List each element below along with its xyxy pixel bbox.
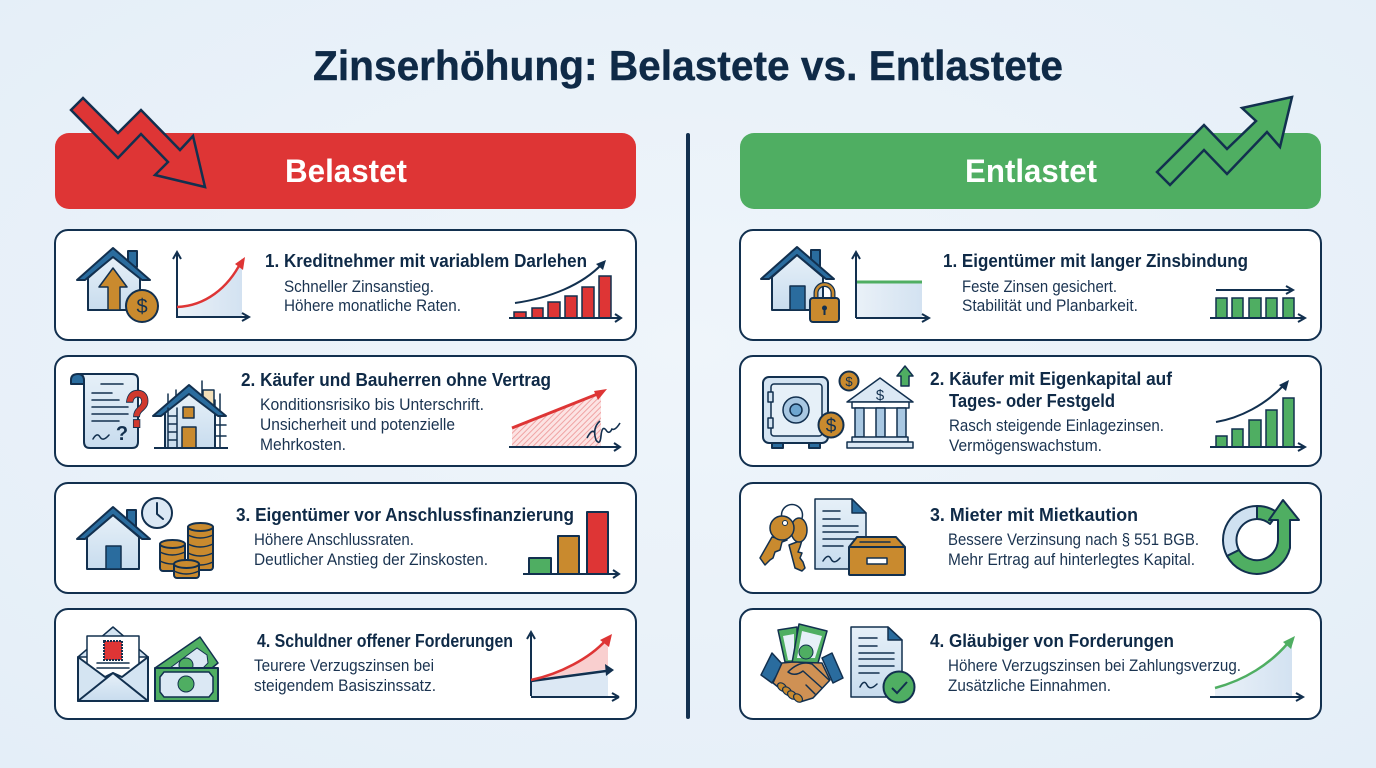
heading: 1. Eigentümer mit langer Zinsbindung [943, 250, 1248, 271]
description: steigendem Basiszinssatz. [254, 676, 436, 695]
icon: house [77, 507, 150, 569]
center divider [686, 133, 690, 719]
icon: banknotes [155, 637, 218, 701]
description: Unsicherheit und potenzielle [260, 415, 455, 434]
icon: house with padlock [761, 247, 839, 322]
description [254, 530, 488, 569]
description: Höhere Verzugszinsen bei Zahlungsverzug. [948, 656, 1241, 675]
icon: house under construction [153, 381, 228, 448]
description: Höhere monatliche Raten. [284, 296, 461, 315]
card 3: Mieter mit Mietkaution [740, 483, 1321, 593]
icon: handshake with banknotes [761, 624, 843, 704]
header: Belastet [55, 133, 636, 209]
description: Mehrkosten. [260, 435, 346, 454]
description [254, 656, 436, 695]
icon: safe with coins [763, 372, 858, 448]
description: Vermögenswachstum. [949, 436, 1102, 455]
icon: envelope with letter [78, 627, 148, 701]
header: Entlastet [740, 133, 1321, 209]
description [948, 656, 1241, 695]
chart: risk area with signature [509, 389, 620, 451]
description [284, 277, 461, 315]
chart: two diverging lines [527, 632, 619, 701]
card 3: Eigentümer vor Anschlussfinanzierung [55, 483, 636, 593]
heading: 3. Eigentümer vor Anschlussfinanzierung [236, 504, 574, 525]
description: Bessere Verzinsung nach § 551 BGB. [948, 530, 1199, 549]
icon: contract with question mark [71, 374, 150, 448]
icon: clock [142, 498, 172, 528]
icon: keys [760, 504, 807, 571]
heading: 4. Gläubiger von Forderungen [930, 630, 1174, 651]
icon: document with check [851, 627, 914, 702]
heading: 1. Kreditnehmer mit variablem Darlehen [265, 250, 587, 271]
heading: Tages- oder Festgeld [949, 390, 1115, 411]
heading: 2. Käufer mit Eigenkapital auf [930, 368, 1173, 389]
description: Deutlicher Anstieg der Zinskosten. [254, 550, 488, 569]
header: Belastet: Belastet [285, 153, 407, 189]
description: Rasch steigende Einlagezinsen. [949, 416, 1164, 435]
icon: contract with question mark: ? [116, 423, 128, 445]
icon: safe with coins: $ [845, 374, 853, 389]
heading: 3. Mieter mit Mietkaution [930, 504, 1138, 525]
chart: rising green curve [1210, 636, 1303, 701]
panel: Entlastet [740, 97, 1321, 719]
chart: flat rate line [852, 252, 929, 322]
chart: even green bars [1210, 286, 1305, 322]
description [949, 416, 1164, 455]
chart: rising curve [173, 252, 249, 321]
description: Feste Zinsen gesichert. [962, 277, 1117, 296]
card 4: Schuldner [55, 609, 636, 719]
icon: coin stacks [160, 523, 213, 578]
card 1: Eigentümer mit Zinsbindung [740, 230, 1321, 340]
chart: growing green bars [1210, 380, 1305, 451]
icon: document and box [815, 499, 905, 575]
description [948, 530, 1199, 569]
description: Stabilität und Planbarkeit. [962, 296, 1138, 315]
card 2: Käufer mit Eigenkapital [740, 356, 1321, 466]
icon: safe with coins: $ [826, 416, 837, 437]
icon: falling arrow [71, 98, 205, 187]
icon: rising arrow [1157, 97, 1292, 185]
heading [930, 368, 1173, 411]
heading: 2. Käufer und Bauherren ohne Vertrag [241, 369, 551, 390]
description: Teurere Verzugszinsen bei [254, 656, 434, 675]
description: Zusätzliche Einnahmen. [948, 676, 1111, 695]
chart: stepped bars [523, 512, 619, 578]
icon: house with arrow and coin [77, 248, 158, 322]
chart: red bars [509, 260, 621, 322]
card 1: Kreditnehmer [55, 230, 636, 340]
card 2: Käufer und Bauherren [55, 356, 636, 466]
description: Konditionsrisiko bis Unterschrift. [260, 395, 484, 414]
title: Zinserhöhung: Belastete vs. Entlastete [313, 42, 1063, 89]
card 4: Gläubiger [740, 609, 1321, 719]
icon: contract with question mark: ? [125, 381, 150, 439]
heading: 4. Schuldner offener Forderungen [257, 630, 513, 651]
icon: house with arrow and coin: $ [136, 296, 148, 318]
panel: Belastet [55, 98, 636, 719]
chart: donut with up arrow [1223, 500, 1299, 574]
header: Entlastet: Entlastet [965, 153, 1097, 189]
description [260, 395, 484, 454]
description: Schneller Zinsanstieg. [284, 277, 434, 296]
description: Mehr Ertrag auf hinterlegtes Kapital. [948, 550, 1195, 569]
description [962, 277, 1138, 315]
description: Höhere Anschlussraten. [254, 530, 414, 549]
icon: bank with arrow [847, 366, 913, 448]
icon: bank with arrow: $ [876, 387, 885, 404]
